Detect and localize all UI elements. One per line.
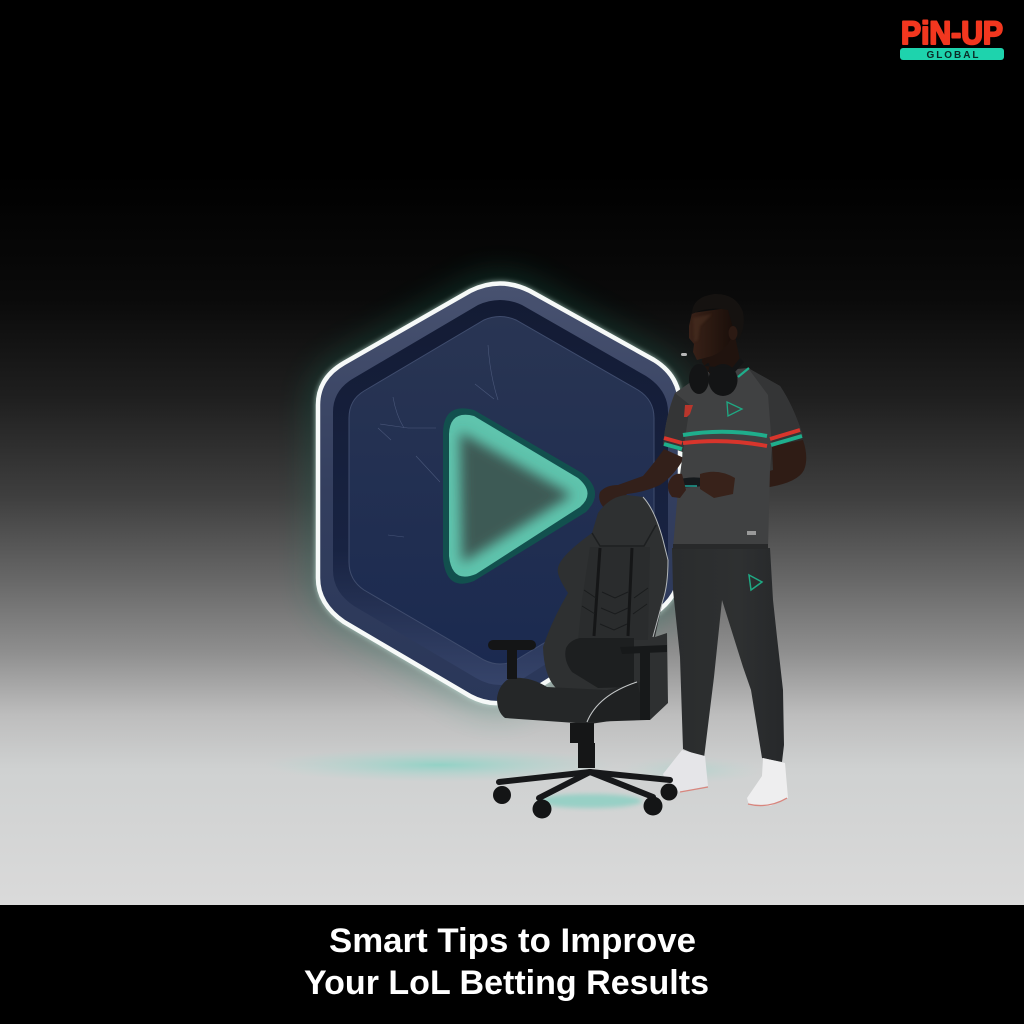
gaming chair [488,495,678,818]
hands and controller [668,472,735,498]
floor glow [265,748,760,808]
play triangle inner shade [460,432,572,563]
chair backrest [543,495,668,720]
sneaker soles [680,787,787,806]
left sneaker [663,750,708,792]
chair back panel [578,547,650,640]
logo: PIN-UP Global [900,15,1004,61]
chair headrest seam [592,525,656,546]
play triangle outer ring [443,408,595,584]
logo wordmark: PiN-UP [901,15,1003,51]
caption bar [0,905,1024,1024]
seat piping [587,682,637,722]
headset microphone [681,353,687,356]
gas lift [570,723,595,768]
caption title: Smart Tips to Improve [329,922,696,960]
shirt hem [673,544,768,549]
headphones [689,358,744,396]
head [689,308,736,360]
hexagon face [349,316,654,664]
hair [692,294,744,340]
hexagon aura [318,284,680,703]
chair base [499,772,670,798]
neck [702,336,741,382]
lumbar pillow [565,638,634,688]
icon: hexagon play badge [318,284,680,703]
shirt stripes [664,430,802,449]
shirt tag [747,531,756,535]
chair piping [643,497,668,637]
logo bar [900,48,1004,60]
trouser logo [749,575,762,590]
hexagon neon edge [318,284,680,703]
ear [728,326,738,340]
shirt logos [684,402,742,417]
caption title: Your LoL Betting Results [304,964,709,1002]
surface scratches [378,345,498,537]
logo subtitle: GLOBAL [926,50,978,61]
face highlight [693,314,712,342]
arm holding chair [599,449,684,511]
person: gamer [599,294,806,806]
shirt shoulders [663,368,803,452]
right sneaker [747,758,788,806]
play triangle glow [449,415,588,577]
shirt [663,368,803,548]
casters [493,784,678,818]
hexagon inner groove [333,300,668,685]
left armrest [488,640,536,679]
far arm [728,440,806,494]
caption title [304,922,709,1002]
seat bolster [587,682,647,722]
seat [497,678,650,724]
right armrest [620,645,667,720]
collar accent [738,368,749,377]
chair stitching [582,548,648,636]
trousers [672,548,784,762]
